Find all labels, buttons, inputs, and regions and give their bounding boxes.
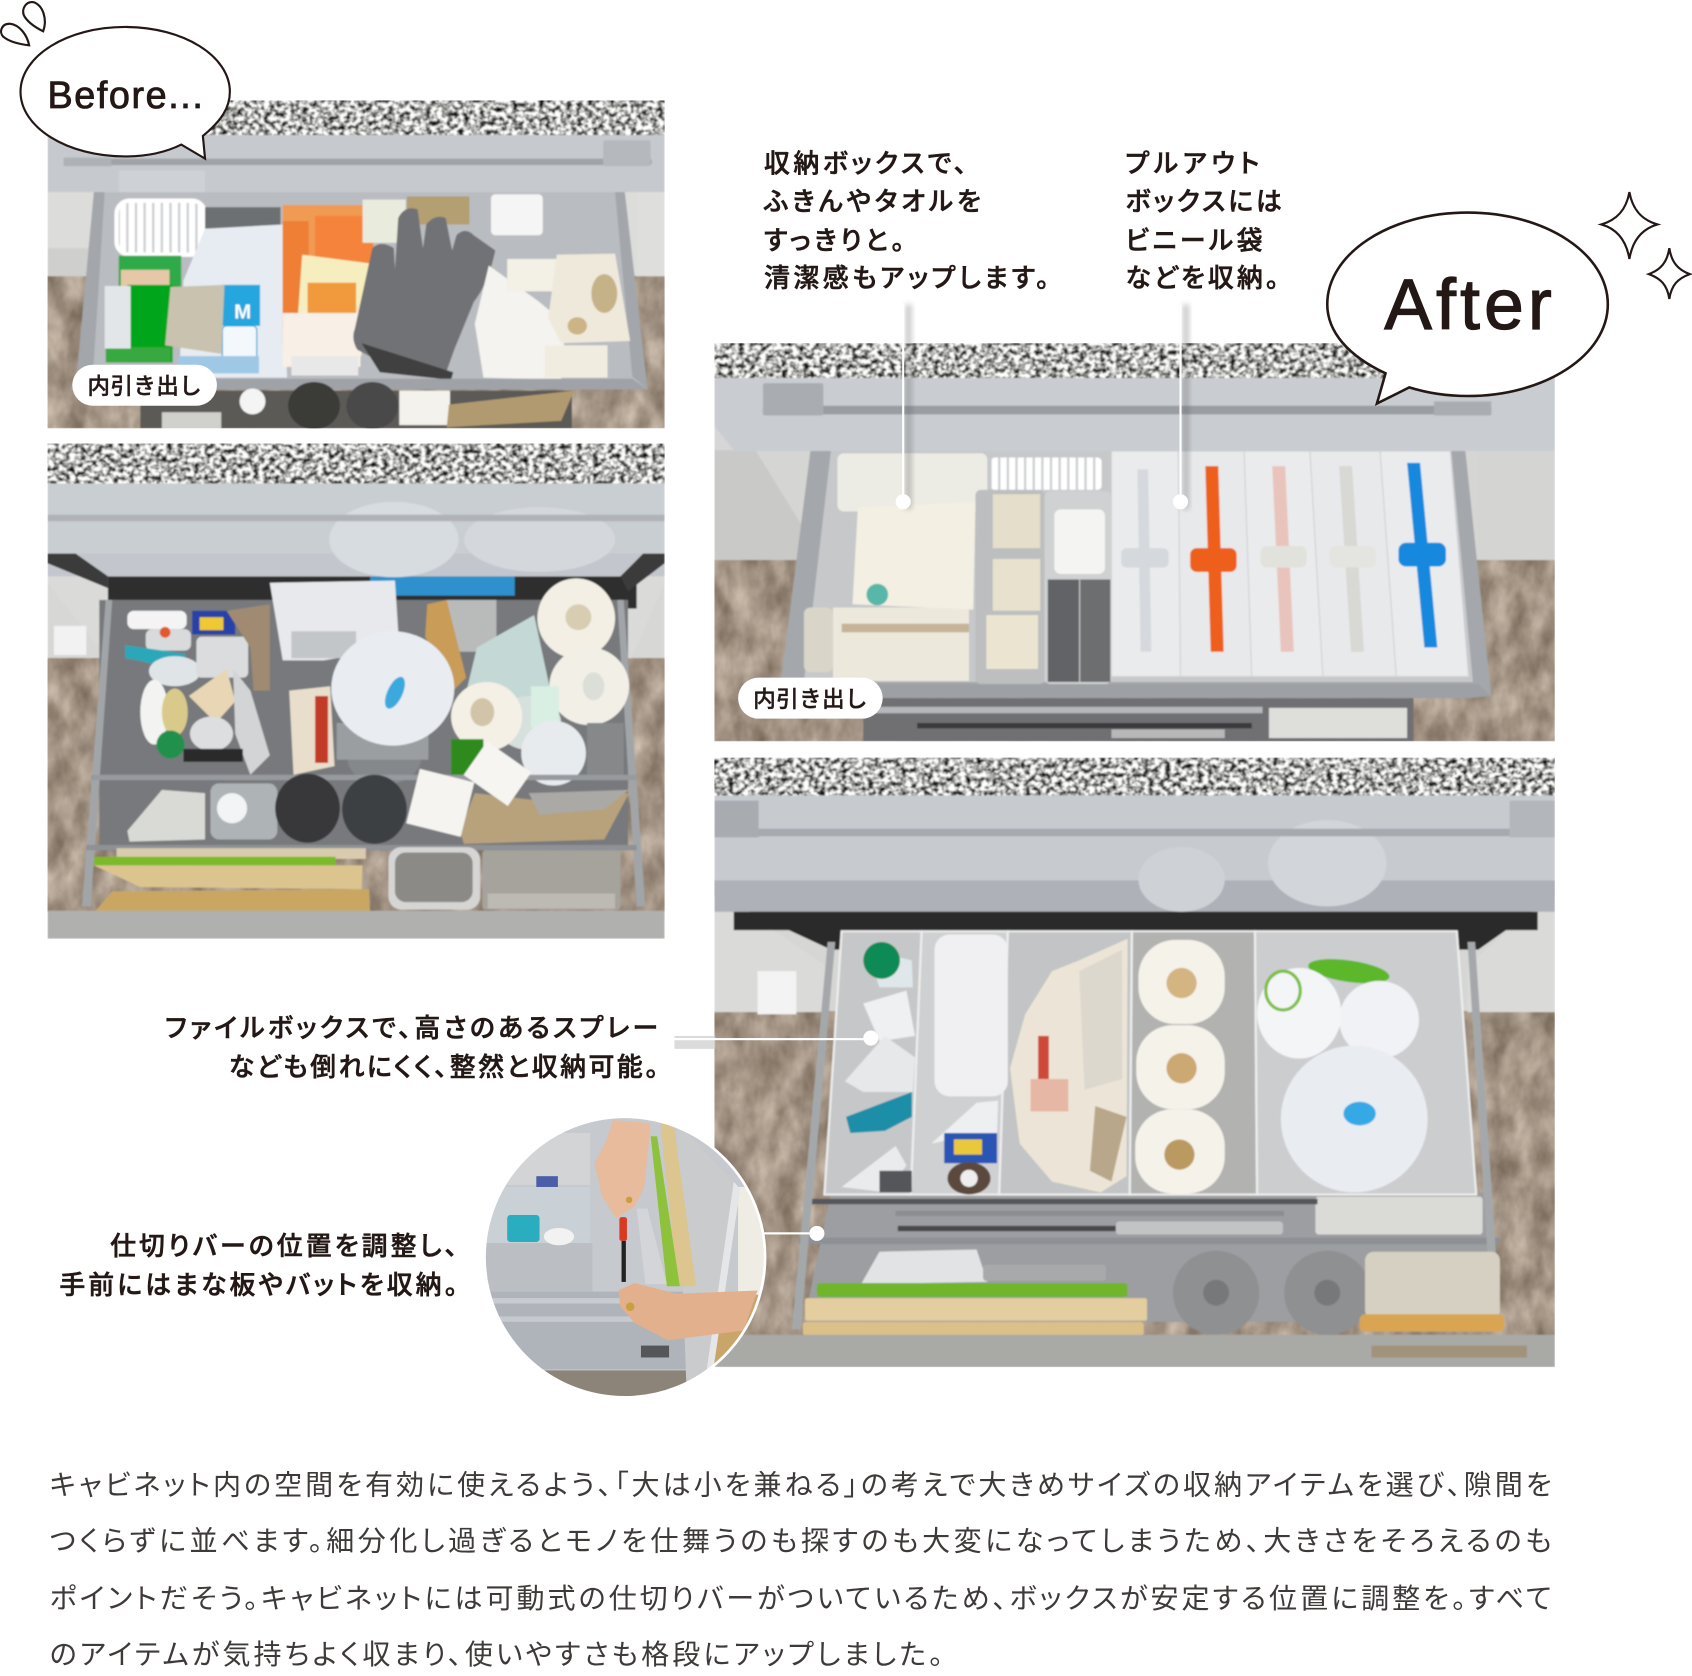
white towel bbox=[852, 502, 975, 610]
callout: towels: すっきりと。 bbox=[764, 227, 904, 255]
basket bbox=[117, 201, 205, 255]
orange packs bbox=[283, 205, 373, 345]
callout: file boxes: なども倒れにくく、整然と収納可能。 bbox=[229, 1053, 658, 1082]
leader line: file boxes bbox=[674, 1031, 878, 1049]
paper rolls bbox=[537, 578, 615, 658]
brown box and white block bbox=[407, 196, 469, 224]
label pill: after: 内引き出し bbox=[753, 686, 868, 712]
spray bottles bbox=[127, 611, 187, 629]
lower items bbox=[127, 790, 205, 842]
white pot and green bbox=[451, 739, 483, 777]
poles bbox=[792, 942, 835, 1329]
handle bbox=[47, 515, 665, 521]
rod lower bbox=[86, 845, 637, 850]
gloves bbox=[353, 208, 495, 380]
front rail bbox=[70, 379, 647, 390]
interior under rods bbox=[804, 1192, 1500, 1322]
photo: after, outer drawer bbox=[714, 758, 1555, 1367]
wooden board and tupperware bbox=[447, 600, 496, 652]
drawer interior bbox=[76, 192, 647, 390]
handle bbox=[714, 829, 1555, 836]
icon: sweat drops bbox=[1, 2, 45, 45]
photo: before, inner drawer bbox=[47, 100, 665, 429]
spray bottles bbox=[842, 942, 915, 1192]
white bags bbox=[934, 934, 1008, 1096]
rails bbox=[485, 1292, 690, 1369]
photo: before, inner drawer: M bbox=[234, 300, 251, 323]
clear case bbox=[975, 490, 1045, 684]
granite counter bbox=[205, 100, 665, 136]
tissue packs bbox=[464, 741, 531, 806]
granite counter bbox=[714, 343, 1555, 378]
white towels bbox=[475, 265, 565, 380]
tray and rods bbox=[1315, 1197, 1483, 1234]
photo: after, inner drawer bbox=[714, 343, 1555, 741]
handle bbox=[763, 406, 1491, 414]
boxes bbox=[485, 1133, 590, 1185]
front rail bbox=[777, 684, 1491, 698]
callout: file boxes bbox=[165, 1014, 658, 1082]
callout: pull-out boxes: ボックスには bbox=[1125, 187, 1282, 216]
granite counter bbox=[714, 758, 1555, 795]
cutting boards bbox=[117, 848, 366, 859]
callout: partition bar: 仕切りバーの位置を調整し、 bbox=[110, 1232, 458, 1261]
callout: towels: 清潔感もアップします。 bbox=[764, 264, 1049, 293]
green box bbox=[119, 256, 181, 288]
sponge bbox=[165, 285, 224, 354]
file boxes bbox=[824, 931, 1476, 1195]
papers bbox=[1010, 939, 1128, 1192]
label pill: before: 内引き出し bbox=[87, 373, 202, 399]
callout: pull-out boxes bbox=[1125, 150, 1282, 293]
screwdriver bbox=[619, 1217, 627, 1282]
callout: towels: ふきんやタオルを bbox=[763, 188, 981, 216]
folded towels bbox=[833, 608, 969, 681]
blue package and bags bbox=[370, 576, 515, 596]
plastic glove bag bbox=[179, 224, 287, 378]
paper rolls bbox=[1138, 940, 1225, 1024]
label pill: before bbox=[72, 365, 217, 406]
granite counter bbox=[47, 443, 665, 483]
basket bbox=[991, 458, 1102, 490]
detergent box and jar bbox=[944, 1133, 997, 1163]
inset circle: adjusting the bar bbox=[483, 1116, 766, 1398]
slot 5 blue bbox=[1398, 463, 1446, 647]
floor panel bbox=[47, 911, 665, 939]
callout: towels: 収納ボックスで、 bbox=[764, 150, 967, 179]
upper hand bbox=[595, 1120, 651, 1218]
cup and tray bbox=[388, 847, 480, 910]
dark opening bbox=[714, 881, 1555, 950]
floor bbox=[47, 658, 665, 912]
floor bbox=[714, 560, 1555, 741]
speech bubble: Before: Before... bbox=[47, 75, 203, 117]
body text: キャビネット内の空間を有効に使えるよう、「大は小を兼ねる」の考えで大きめサイズの収納アイテムを選び、隙間を bbox=[50, 1470, 1552, 1501]
slot 2 orange bbox=[1190, 466, 1237, 652]
leader line: towels bbox=[896, 304, 912, 509]
plastic container bbox=[1365, 1252, 1500, 1319]
cardboard stack bbox=[460, 793, 629, 844]
label pill: after bbox=[738, 678, 883, 719]
slot 3 pink bbox=[1260, 466, 1307, 652]
handle bbox=[64, 159, 652, 165]
drawer bbox=[779, 451, 1491, 696]
callout: pull-out boxes: ビニール袋 bbox=[1125, 226, 1263, 255]
leader line: pull-out boxes bbox=[1173, 304, 1189, 509]
white rack and tablet bbox=[861, 1250, 987, 1284]
green lid and white bowls bbox=[1307, 955, 1391, 988]
salad spinner lid bbox=[1281, 1046, 1428, 1192]
callout: partition bar: 手前にはまな板やバットを収納。 bbox=[59, 1271, 458, 1300]
rod upper bbox=[91, 775, 637, 780]
speech bubble: After bbox=[1327, 213, 1608, 404]
floor bbox=[714, 1011, 1555, 1335]
poles bbox=[82, 600, 112, 906]
lower items bbox=[140, 391, 572, 428]
lid container bbox=[348, 760, 420, 783]
clear bag bbox=[466, 614, 550, 698]
lower hand bbox=[618, 1283, 758, 1340]
boards bbox=[660, 1122, 696, 1286]
icon: sparkles bbox=[1601, 192, 1690, 299]
body text: つくらずに並べます。細分化し過ぎるとモノを仕舞うのも探すのも大変になってしまうため、大きさをそろえるのも bbox=[50, 1526, 1552, 1557]
speech bubble: Before bbox=[21, 27, 230, 159]
body text: ポイントだそう。キャビネットには可動式の仕切りバーがついているため、ボックスが安定する位置に調整を。すべて bbox=[50, 1583, 1552, 1614]
drawer front bbox=[47, 483, 665, 576]
callout: partition bar bbox=[59, 1232, 458, 1300]
second case with cup and sponges bbox=[1045, 491, 1111, 684]
drawer front bbox=[714, 378, 1555, 451]
cabinet interior bbox=[628, 658, 630, 659]
slot 1 clear bbox=[1121, 469, 1169, 652]
callout: towels bbox=[763, 150, 1049, 293]
floor bbox=[47, 276, 665, 428]
drawer front bbox=[714, 795, 1555, 881]
muslin cloth bbox=[548, 254, 630, 343]
paper roll bbox=[837, 453, 987, 511]
pots bbox=[1173, 1251, 1259, 1335]
rods below bbox=[863, 698, 1414, 741]
body text bbox=[50, 1470, 1552, 1670]
cutting boards bbox=[817, 1283, 1128, 1297]
drawer front bbox=[47, 135, 665, 192]
leader line: partition bar bbox=[764, 1226, 824, 1241]
pull-out boxes bbox=[1111, 451, 1469, 677]
body text: のアイテムが気持ちよく収まり、使いやすさも格段にアップしました。 bbox=[50, 1639, 943, 1670]
speech bubble: After: After bbox=[1384, 266, 1552, 345]
photo: before, outer drawer bbox=[47, 443, 665, 939]
callout: pull-out boxes: などを収納。 bbox=[1125, 264, 1279, 293]
callout: file boxes: ファイルボックスで、高さのあるスプレー bbox=[165, 1014, 658, 1043]
side panel and clothes bbox=[738, 1187, 766, 1295]
slot 4 white bbox=[1329, 466, 1376, 652]
bottom panel bbox=[714, 1335, 1555, 1367]
carton box bbox=[289, 686, 335, 775]
callout: pull-out boxes: プルアウト bbox=[1125, 150, 1259, 179]
